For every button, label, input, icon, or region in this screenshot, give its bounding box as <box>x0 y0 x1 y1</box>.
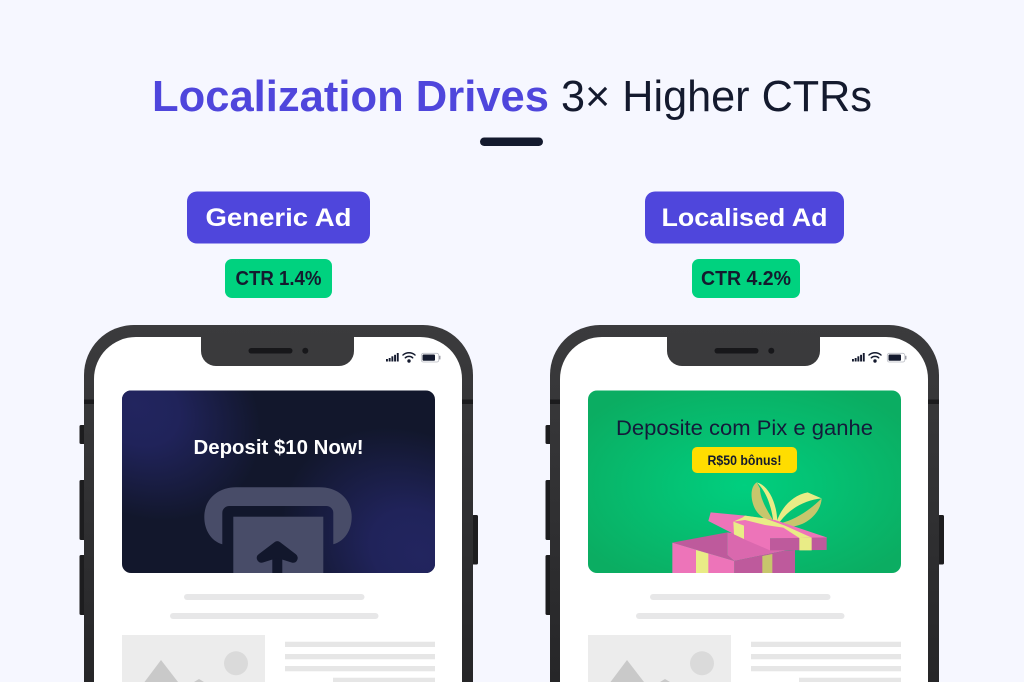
notch <box>201 336 354 366</box>
badge: CTR 4.2% <box>692 259 800 298</box>
phone screen <box>560 337 928 682</box>
icon: deposit slot with arrow <box>204 487 352 574</box>
bow <box>752 482 773 520</box>
label: generic ad: Generic Ad <box>206 204 352 232</box>
title underline <box>480 138 543 146</box>
title: 3× Higher CTRs <box>561 72 872 121</box>
label: localised ad <box>645 192 844 244</box>
status icons <box>386 353 440 363</box>
image placeholder <box>122 635 265 682</box>
image placeholder <box>588 635 731 682</box>
side buttons <box>546 425 944 615</box>
box interior <box>672 532 734 561</box>
label: generic ad <box>187 192 370 244</box>
phone body <box>84 325 473 682</box>
bonus badge <box>692 447 797 473</box>
lid <box>708 512 827 550</box>
ad card: deposit <box>122 390 435 574</box>
label: localised ad: Localised Ad <box>662 204 828 232</box>
title: Localization Drives <box>152 72 549 121</box>
content placeholder lines <box>636 594 844 619</box>
icon: gift box <box>672 482 827 575</box>
phone body <box>550 325 939 682</box>
phone: localised ad <box>546 325 944 682</box>
title <box>152 72 872 121</box>
ad card: pix bonus <box>588 390 901 575</box>
badge: CTR 1.4%: CTR 1.4% <box>236 268 322 290</box>
badge: CTR 4.2%: CTR 4.2% <box>701 268 791 290</box>
box faces <box>672 543 734 575</box>
bonus badge: R$50 bônus! <box>708 453 782 468</box>
antenna bands <box>84 400 473 404</box>
speaker and camera <box>714 348 774 354</box>
speaker and camera <box>248 348 308 354</box>
side buttons <box>80 425 478 615</box>
antenna bands <box>550 400 939 404</box>
badge: CTR 1.4% <box>225 259 332 298</box>
phone screen <box>94 337 462 682</box>
phone: generic ad <box>80 325 478 682</box>
status icons <box>852 353 906 363</box>
content placeholder lines <box>170 594 378 619</box>
text placeholder lines <box>751 642 901 682</box>
notch <box>667 336 820 366</box>
text placeholder lines <box>285 642 435 682</box>
ad headline: Deposit $10 Now! <box>194 436 364 459</box>
ad headline: Deposite com Pix e ganhe <box>616 417 873 440</box>
